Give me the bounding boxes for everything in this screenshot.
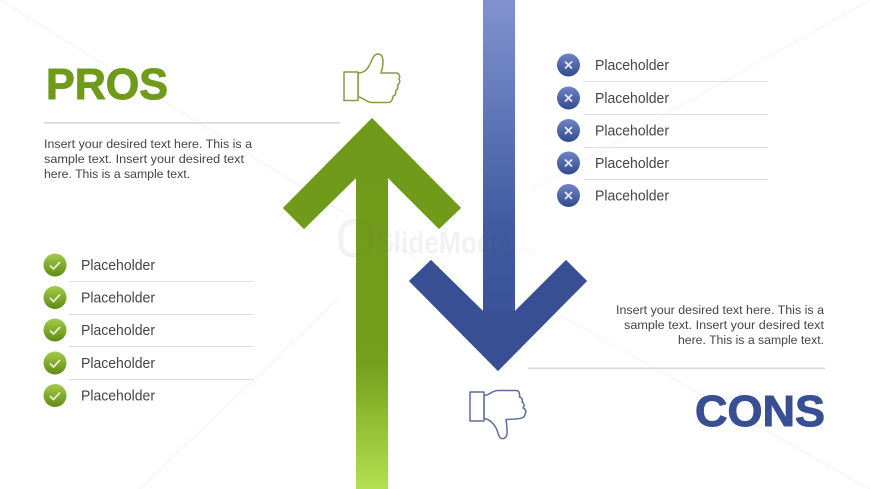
item 5: Placeholder — [595, 188, 669, 204]
item 1 — [557, 54, 768, 82]
item 1: Placeholder — [595, 58, 669, 74]
watermark: SlideModel — [376, 225, 515, 260]
item 3: Placeholder — [81, 323, 155, 339]
item 5: Placeholder — [81, 388, 155, 404]
item 5 — [44, 384, 155, 407]
item 4: Placeholder — [81, 356, 155, 372]
item 1 — [44, 254, 254, 282]
cons description: Insert your desired text here. This is a — [616, 303, 824, 317]
blue down arrow — [409, 0, 587, 371]
item 3 — [44, 318, 254, 347]
item 2 — [557, 86, 768, 115]
cons heading: CONS — [695, 387, 825, 436]
item 2 — [44, 286, 254, 315]
pros description — [44, 137, 252, 181]
cons divider — [528, 368, 825, 369]
pros checklist — [44, 254, 254, 407]
item 4 — [557, 152, 768, 180]
pros heading: PROS — [46, 60, 168, 109]
item 4: Placeholder — [595, 156, 669, 172]
pros description: Insert your desired text here. This is a — [44, 137, 252, 151]
cons checklist — [557, 54, 768, 207]
icon: thumbs up — [344, 54, 400, 102]
green up arrow — [283, 118, 461, 489]
item 5 — [557, 184, 669, 207]
watermark: .com — [516, 246, 536, 256]
item 2: Placeholder — [595, 91, 669, 107]
cons description — [616, 303, 825, 347]
pros description: sample text. Insert your desired text — [44, 152, 245, 166]
item 1: Placeholder — [81, 258, 155, 274]
pros description: here. This is a sample text. — [44, 167, 190, 181]
cons description: here. This is a sample text. — [678, 333, 824, 347]
item 4 — [44, 352, 254, 380]
cons description: sample text. Insert your desired text — [624, 318, 825, 332]
icon: thumbs down — [470, 390, 526, 439]
pros divider — [44, 122, 340, 124]
item 2: Placeholder — [81, 290, 155, 306]
item 3: Placeholder — [595, 124, 669, 140]
item 3 — [557, 119, 768, 148]
